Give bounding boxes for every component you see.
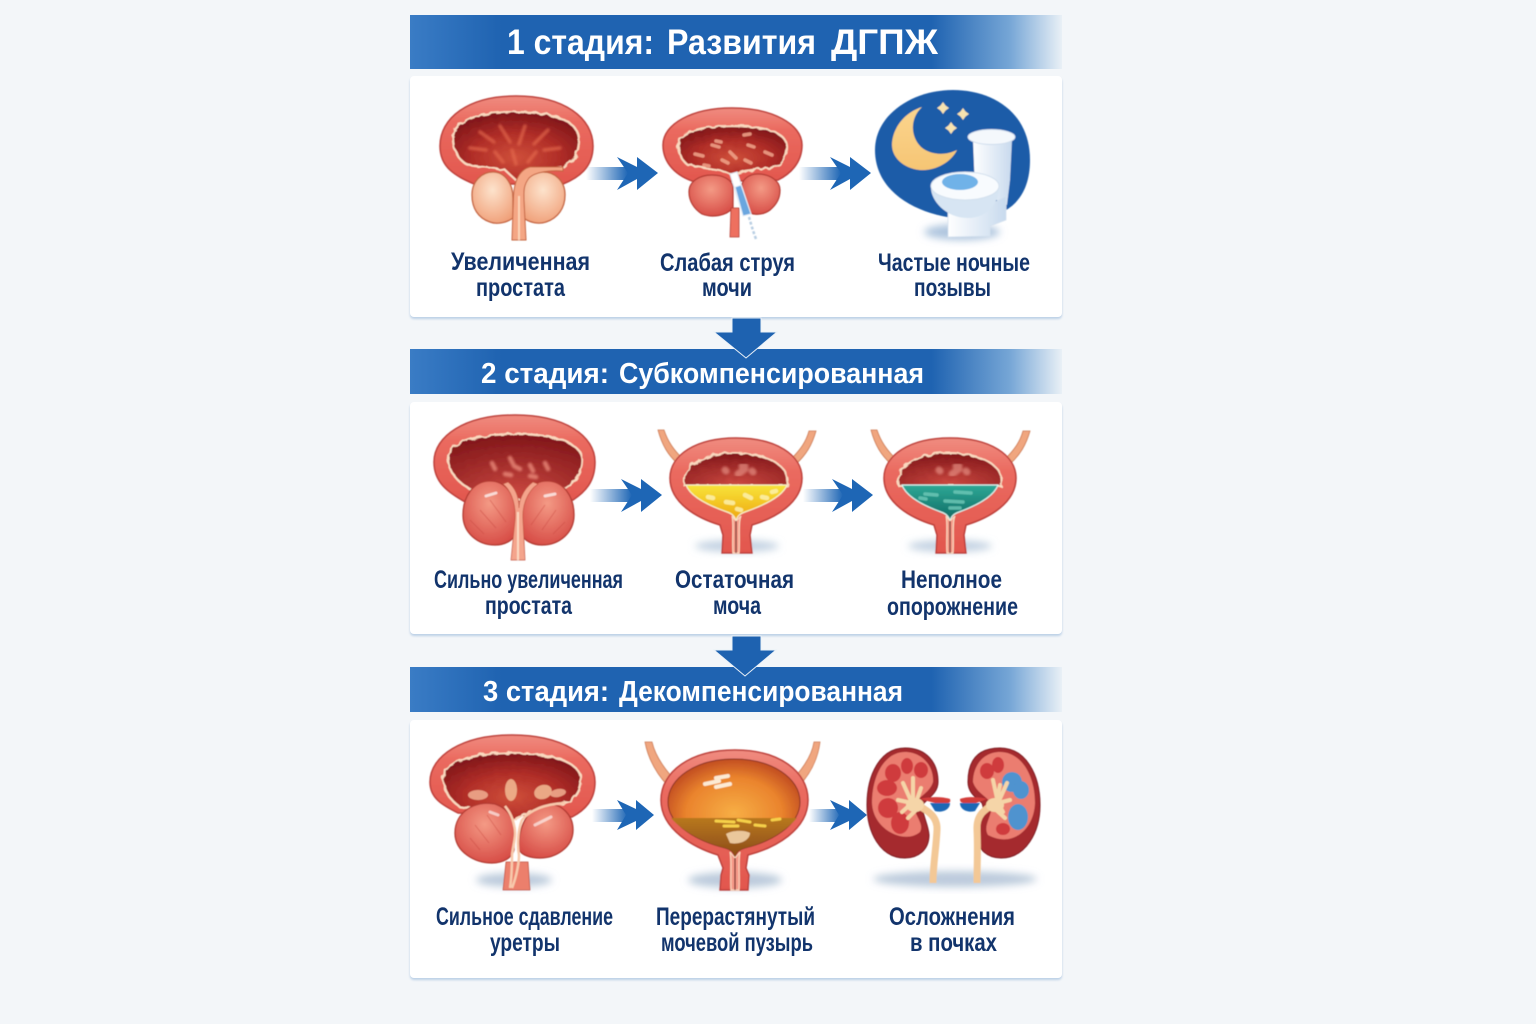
label: incomplete emptying: [887, 566, 1018, 621]
stage 1 heading: Развития: [667, 23, 816, 62]
illustration: enlarged prostate: [440, 96, 593, 240]
panel: stage 1: [410, 76, 1062, 319]
stage 1 heading: ДГПЖ: [831, 23, 938, 62]
arrow: [586, 157, 658, 190]
label: weak stream: Слабая струя: [660, 249, 795, 277]
label: kidney complications: Осложнения: [889, 903, 1015, 931]
arrow: [592, 800, 654, 830]
label: weak stream: мочи: [702, 274, 752, 302]
stage 2 heading: 2 стадия:: [481, 358, 609, 390]
arrow: stage 1 to stage 2: [714, 318, 777, 358]
arrow: [809, 800, 867, 830]
illustration: incomplete emptying: [871, 430, 1030, 553]
label: greatly enlarged prostate: простата: [485, 592, 573, 620]
label: kidney complications: в почках: [910, 929, 997, 957]
panel: stage 2: [410, 402, 1062, 636]
stage 3 heading: [410, 667, 1062, 712]
label: night urges: Частые ночные: [878, 249, 1030, 277]
panel: stage 3: [410, 720, 1062, 980]
arrow: [803, 479, 873, 512]
illustration: greatly enlarged prostate: [434, 415, 595, 560]
label: urethra compression: Сильное сдавление: [436, 903, 613, 931]
label: urethra compression: уретры: [490, 929, 560, 957]
label: enlarged prostate: Увеличенная: [451, 248, 590, 276]
label: greatly enlarged prostate: Сильно увеличенная: [434, 566, 623, 594]
label: urethra compression: [436, 903, 613, 957]
label: residual urine: моча: [713, 592, 762, 620]
label: overdistended bladder: [656, 903, 815, 957]
illustration: kidneys: [867, 748, 1040, 887]
label: weak stream: [660, 249, 795, 302]
label: greatly enlarged prostate: [434, 566, 623, 620]
arrow: [799, 157, 871, 190]
stage 1 heading: 1 стадия:: [507, 23, 654, 62]
stage 3 heading: Декомпенсированная: [619, 676, 903, 708]
stage 3 heading: 3 стадия:: [483, 676, 609, 708]
label: enlarged prostate: [451, 248, 590, 302]
label: night urges: позывы: [914, 274, 991, 302]
label: residual urine: Остаточная: [675, 566, 794, 594]
arrow: stage 2 to stage 3: [714, 636, 776, 676]
label: enlarged prostate: простата: [476, 274, 566, 302]
label: incomplete emptying: Неполное: [901, 566, 1002, 594]
label: night urges: [878, 249, 1030, 302]
arrow: [590, 479, 662, 512]
label: kidney complications: [889, 903, 1015, 957]
label: overdistended bladder: Перерастянутый: [656, 903, 815, 931]
stage 2 heading: [410, 349, 1062, 394]
illustration: urethra compression: [430, 735, 595, 890]
stage 1 heading: [410, 15, 1062, 69]
label: overdistended bladder: мочевой пузырь: [661, 929, 813, 957]
icon: night toilet: [875, 90, 1030, 240]
label: incomplete emptying: опорожнение: [887, 593, 1018, 621]
illustration: weak stream: [663, 108, 802, 239]
label: residual urine: [675, 566, 794, 620]
illustration: residual urine: [658, 430, 816, 553]
illustration: overdistended bladder: [645, 742, 820, 890]
stage 2 heading: Субкомпенсированная: [619, 358, 924, 390]
